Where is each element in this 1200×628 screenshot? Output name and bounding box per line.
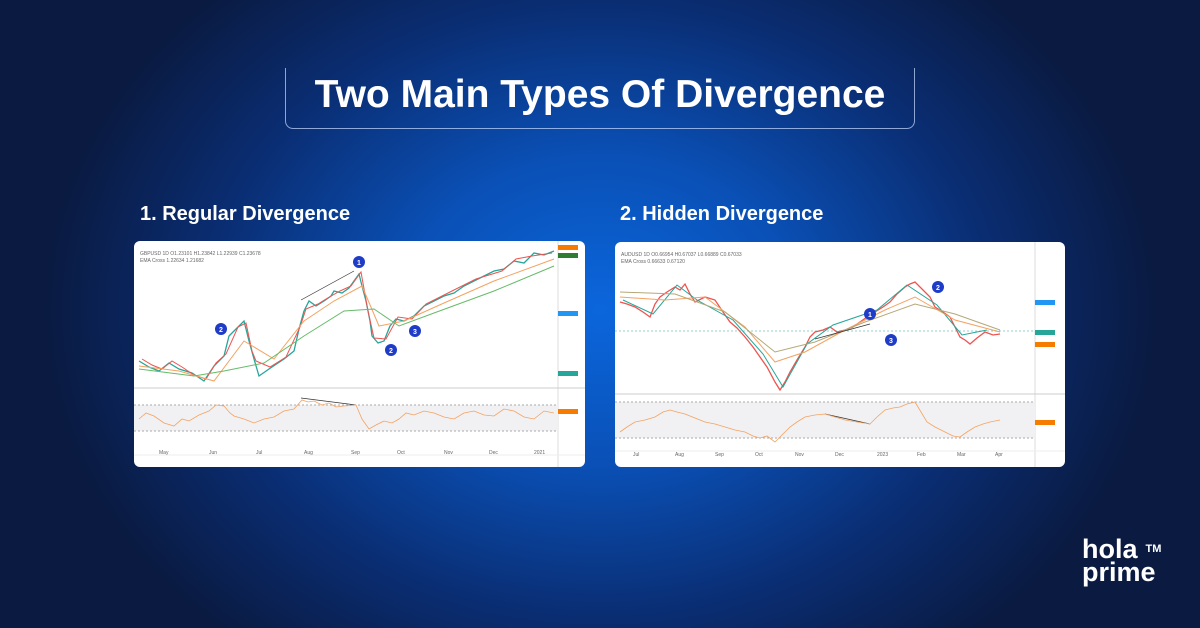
chart: hidden divergence: AUDUSD 1D O0.66954 H0.67037 L0.66889 C0.67033 [621, 252, 742, 258]
chart: hidden divergence: Nov [795, 452, 804, 458]
chart: regular divergence: Jul [256, 450, 262, 456]
markers: 2 [936, 285, 940, 292]
chart: hidden divergence: 2023 [877, 452, 888, 458]
chart: regular divergence: EMA Cross 1.22634 1.21682 [140, 258, 204, 264]
chart: hidden divergence: Oct [755, 452, 763, 458]
chart: hidden divergence [615, 242, 1065, 467]
chart: regular divergence: Oct [397, 450, 405, 456]
markers [864, 281, 944, 346]
markers: 1 [357, 260, 361, 267]
title: Two Main Types Of Divergence [315, 73, 885, 116]
chart: regular divergence [134, 241, 585, 467]
title [285, 68, 915, 129]
chart: regular divergence: Aug [304, 450, 313, 456]
chart: hidden divergence: EMA Cross 0.66633 0.67120 [621, 259, 685, 265]
heading: regular divergence: 1. Regular Divergence [140, 203, 350, 225]
markers: 2 [389, 348, 393, 355]
chart: hidden divergence: Mar [957, 452, 966, 458]
chart: regular divergence: May [159, 450, 169, 456]
chart: regular divergence: Dec [489, 450, 498, 456]
heading: hidden divergence: 2. Hidden Divergence [620, 203, 823, 225]
chart: regular divergence: Jun [209, 450, 217, 456]
markers: 3 [413, 329, 417, 336]
logo: hola TM [1082, 534, 1161, 564]
chart: hidden divergence: Jul [633, 452, 639, 458]
chart: regular divergence: GBPUSD 1D O1.23101 H1.23842 L1.22939 C1.23678 [140, 251, 261, 257]
chart: regular divergence: Nov [444, 450, 453, 456]
chart: hidden divergence: Apr [995, 452, 1003, 458]
chart: hidden divergence: Feb [917, 452, 926, 458]
chart: regular divergence: Sep [351, 450, 360, 456]
chart: hidden divergence: Sep [715, 452, 724, 458]
markers: 1 [868, 312, 872, 319]
logo [1082, 534, 1161, 587]
markers: 3 [889, 338, 893, 345]
chart: hidden divergence: Dec [835, 452, 844, 458]
chart: regular divergence: 2021 [534, 450, 545, 456]
markers [215, 256, 421, 356]
logo: prime [1082, 557, 1156, 587]
chart: hidden divergence: Aug [675, 452, 684, 458]
markers: 2 [219, 327, 223, 334]
